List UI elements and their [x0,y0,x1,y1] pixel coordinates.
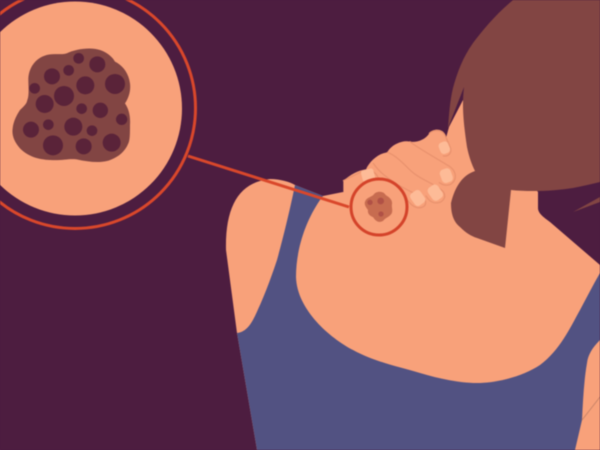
skin disc [0,2,182,216]
outer ring [0,0,196,228]
finger outlines [343,131,455,208]
hand silhouette [343,130,455,217]
arm crease [582,397,600,420]
hair: main mass with ponytail [448,0,600,248]
fingernails [360,140,454,207]
skin: back, arm and neck [226,100,600,450]
small magnifier circle with mole [351,179,407,235]
magnified mole [12,48,130,162]
hair [448,0,600,248]
small mole [365,192,392,222]
connector line [188,156,349,207]
tank top [237,185,600,450]
hair: loose strand [573,197,600,212]
large magnified circle [0,0,196,228]
hand on neck [343,130,455,217]
mole spots [23,53,127,155]
